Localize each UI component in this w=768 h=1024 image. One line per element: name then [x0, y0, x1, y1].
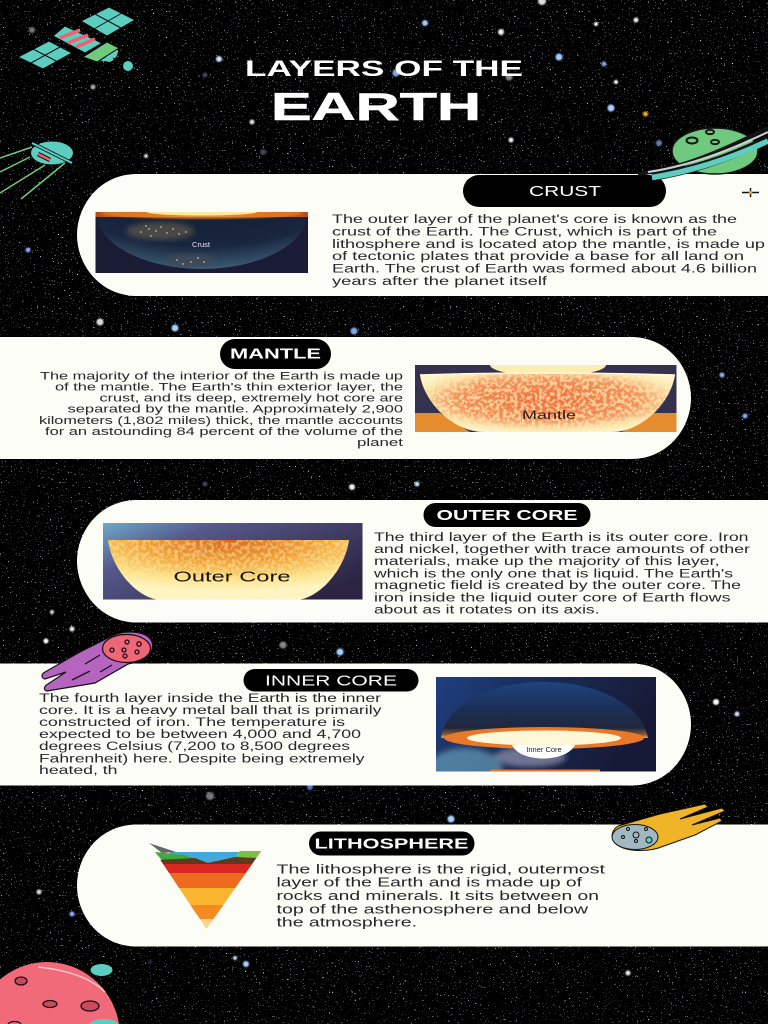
- crust body text: lithosphere and is located atop the mantle, is made up: [332, 239, 765, 251]
- outer core body text: magnetic field is created by the outer core. The: [374, 580, 741, 592]
- inner core heading pill: INNER CORE: [265, 672, 397, 690]
- outer core body text: and nickel, together with trace amounts of other: [374, 544, 750, 556]
- mantle body text: crust, and its deep, extremely hot core are: [100, 393, 403, 405]
- lithosphere panel background: [77, 824, 768, 946]
- inner core body text: [39, 693, 382, 777]
- inner core body text: constructed of iron. The temperature is: [39, 717, 345, 729]
- outer core body text: materials, make up the majority of this layer,: [374, 556, 720, 568]
- inner core body text: degrees Celsius (7,200 to 8,500 degrees: [39, 741, 350, 753]
- panel: crust: [77, 174, 768, 296]
- mantle image: [415, 365, 676, 432]
- icon: yellow comet: [612, 804, 725, 851]
- outer core heading pill: OUTER CORE: [436, 507, 578, 524]
- lithosphere body text: rocks and minerals. It sits between on: [276, 888, 599, 903]
- icon: small star: [742, 188, 759, 197]
- crust image: [96, 212, 308, 273]
- crust body text: crust of the Earth. The Crust, which is part of the: [332, 226, 717, 238]
- panel: outer core: [77, 500, 768, 622]
- mantle image: Mantle: [522, 410, 576, 422]
- lithosphere body text: layer of the Earth and is made up of: [276, 875, 583, 890]
- mantle body text: for an astounding 84 percent of the volume of the: [45, 426, 403, 438]
- panel: mantle: [0, 337, 691, 459]
- crust body text: of tectonic plates that provide a base for all land on: [332, 251, 744, 263]
- lithosphere body text: top of the asthenosphere and below: [276, 901, 589, 916]
- mantle heading pill: [220, 339, 331, 369]
- outer core body text: about as it rotates on its axis.: [374, 604, 600, 616]
- mantle body text: kilometers (1,802 miles) thick, the mantle accounts: [39, 415, 404, 427]
- inner core image: Inner Core: [526, 745, 562, 754]
- lithosphere body text: The lithosphere is the rigid, outermost: [276, 861, 606, 876]
- panel: inner core: [0, 664, 691, 792]
- outer core image: Outer Core: [174, 570, 290, 586]
- title line 1: LAYERS OF THE: [245, 56, 523, 81]
- lithosphere heading pill: LITHOSPHERE: [314, 836, 468, 852]
- inner core panel background: [0, 664, 691, 786]
- icon: sputnik probe: [0, 142, 73, 199]
- outer core body text: iron inside the liquid outer core of Earth flows: [374, 593, 731, 605]
- outer core heading pill: [424, 503, 590, 527]
- icon: satellite: [18, 7, 135, 71]
- crust image: Crust: [192, 240, 211, 249]
- lithosphere wedge diagram: [149, 843, 263, 929]
- outer core image: [103, 523, 363, 600]
- title line 2: EARTH: [271, 86, 481, 129]
- crust body text: The outer layer of the planet's core is known as the: [332, 214, 737, 226]
- mantle body text: [39, 370, 404, 449]
- crust heading pill: [463, 175, 666, 207]
- crust body text: years after the planet itself: [332, 276, 548, 288]
- outer core body text: The third layer of the Earth is its outer core. Iron: [374, 532, 748, 544]
- crust body text: [332, 214, 765, 288]
- icon: purple comet: [42, 632, 153, 691]
- outer core body text: [372, 532, 750, 616]
- inner core heading pill: [244, 669, 418, 692]
- inner core body text: Fahrenheit) here. Despite being extremely: [39, 753, 365, 765]
- panel: lithosphere: [77, 824, 768, 946]
- lithosphere body text: the atmosphere.: [276, 915, 417, 930]
- inner core body text: The fourth layer inside the Earth is the inner: [39, 693, 381, 705]
- title: [245, 56, 523, 129]
- outer core panel background: [77, 500, 768, 622]
- lithosphere body text: [276, 861, 606, 930]
- outer core body text: which is the only one that is liquid. The Earth's: [372, 568, 733, 580]
- inner core body text: core. It is a heavy metal ball that is primarily: [39, 705, 382, 717]
- lithosphere heading pill: [309, 832, 474, 856]
- inner core body text: heated, th: [39, 765, 118, 777]
- icon: pink planet with moons: [0, 962, 119, 1024]
- inner core body text: expected to be between 4,000 and 4,700: [39, 729, 361, 741]
- crust body text: Earth. The crust of Earth was formed about 4.6 billion: [332, 264, 757, 276]
- inner core image: [436, 677, 656, 772]
- mantle body text: planet: [357, 437, 403, 449]
- crust panel background: [77, 174, 768, 296]
- mantle body text: separated by the mantle. Approximately 2,900: [68, 404, 403, 416]
- mantle body text: of the mantle. The Earth's thin exterior layer, the: [55, 382, 403, 394]
- crust heading pill: CRUST: [529, 183, 601, 200]
- mantle heading pill: MANTLE: [230, 346, 321, 362]
- mantle body text: The majority of the interior of the Earth is made up: [40, 370, 403, 382]
- icon: ringed green planet: [638, 128, 768, 178]
- mantle panel background: [0, 337, 691, 459]
